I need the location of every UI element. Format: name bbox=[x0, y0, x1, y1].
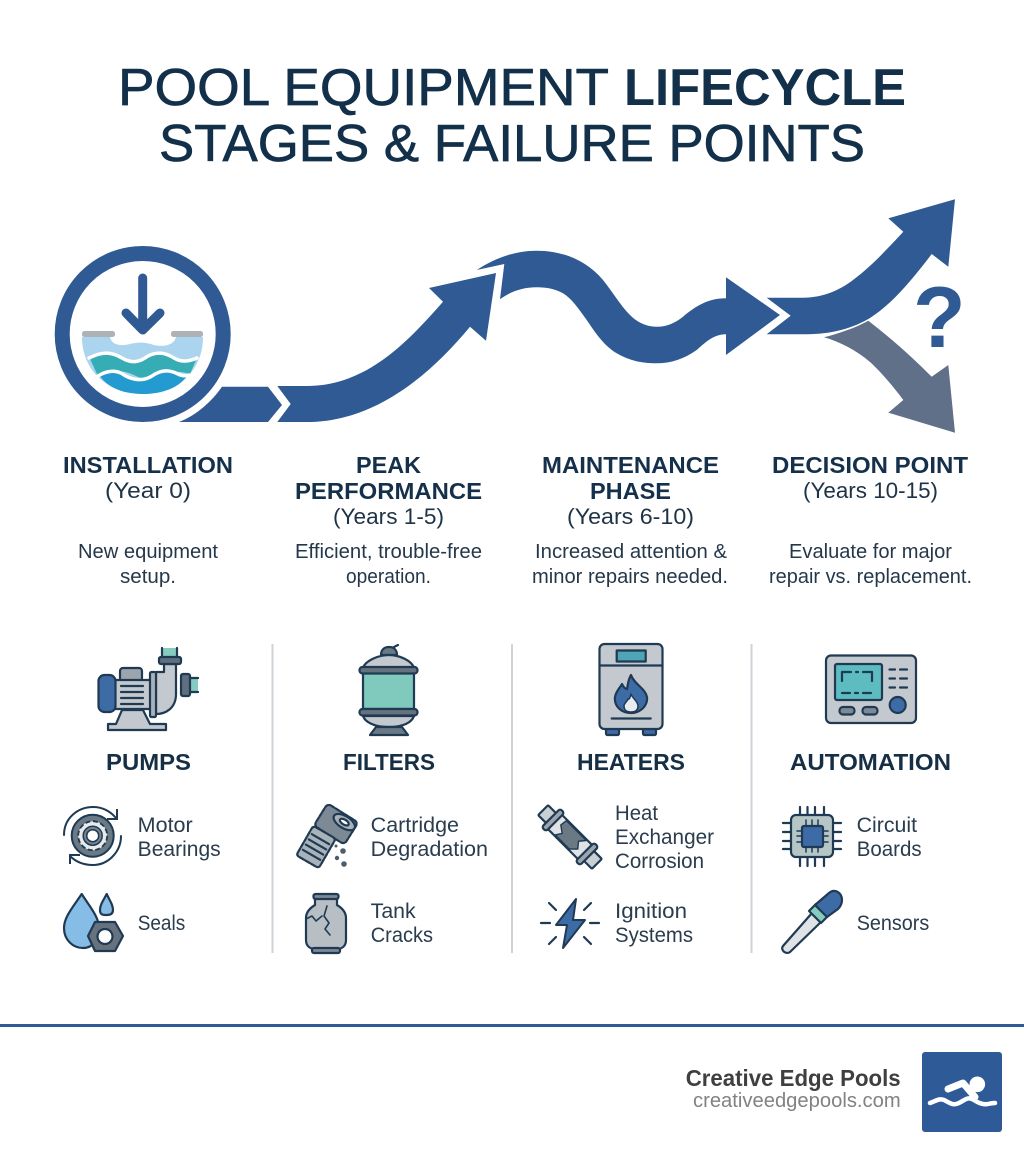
title: LIFECYCLE bbox=[624, 59, 906, 117]
label: tank cracks bbox=[371, 900, 433, 947]
heading: automation: AUTOMATION bbox=[790, 749, 951, 775]
label: cartridge degradation bbox=[371, 814, 488, 861]
label: sensors: Sensors bbox=[857, 912, 929, 935]
title: POOL EQUIPMENT bbox=[118, 59, 609, 117]
stage: peak performance: PEAK bbox=[356, 452, 421, 478]
stage: peak performance: PERFORMANCE bbox=[295, 478, 482, 504]
stage: peak performance: (Years 1-5) bbox=[333, 504, 444, 529]
stage: maintenance phase bbox=[532, 452, 728, 588]
icon: installation badge bbox=[62, 254, 223, 414]
stage: decision point: repair vs. replacement. bbox=[769, 566, 972, 588]
panel: filters bbox=[296, 645, 488, 953]
stage: maintenance phase: Increased attention & bbox=[535, 541, 728, 563]
lifecycle flow arrows bbox=[62, 199, 966, 433]
website: creativeedgepools.com bbox=[693, 1090, 901, 1112]
panel: automation bbox=[782, 656, 951, 953]
label: tank cracks: Tank bbox=[371, 900, 416, 923]
arrow: peak performance segment bbox=[277, 273, 496, 422]
stage: decision point: Evaluate for major bbox=[789, 541, 952, 563]
brand name: Creative Edge Pools bbox=[686, 1065, 901, 1091]
label: heat exchanger corrosion bbox=[615, 802, 714, 873]
stage: installation bbox=[63, 452, 233, 588]
label: circuit boards: Circuit bbox=[857, 814, 917, 837]
heading: pumps: PUMPS bbox=[106, 749, 191, 775]
stage: installation: New equipment bbox=[78, 541, 218, 563]
logo: swimmer bbox=[922, 1052, 1002, 1132]
arrow: decision upward branch bbox=[767, 199, 955, 334]
label: heat exchanger corrosion: Corrosion bbox=[615, 850, 704, 873]
arrow: installation segment bbox=[179, 387, 282, 422]
stage: decision point: DECISION POINT bbox=[772, 452, 968, 478]
arrow: decision downward branch bbox=[824, 321, 955, 433]
heading: filters: FILTERS bbox=[343, 749, 435, 775]
icon: pump bbox=[98, 648, 198, 730]
stage: installation: (Year 0) bbox=[105, 478, 191, 503]
icon: corroded heat exchanger bbox=[534, 801, 606, 873]
panel: heaters bbox=[534, 644, 714, 948]
label: ignition systems: Ignition bbox=[615, 900, 687, 923]
icon: sensor probe bbox=[782, 891, 842, 953]
panel: pumps bbox=[64, 648, 221, 951]
label: cartridge degradation: Degradation bbox=[371, 838, 488, 861]
icon: control panel bbox=[826, 656, 916, 723]
stage: maintenance phase: minor repairs needed. bbox=[532, 566, 728, 588]
heading: heaters: HEATERS bbox=[577, 749, 685, 775]
stage: decision point bbox=[769, 452, 972, 588]
icon: motor bearing bbox=[64, 807, 121, 865]
label: circuit boards: Boards bbox=[857, 838, 922, 861]
title: STAGES & FAILURE POINTS bbox=[159, 115, 865, 173]
icon: sand filter bbox=[360, 645, 418, 735]
icon: seals bbox=[64, 894, 123, 951]
label: ignition systems: Systems bbox=[615, 924, 693, 947]
stage: peak performance: Efficient, trouble-free bbox=[295, 541, 482, 563]
stage: peak performance: operation. bbox=[346, 566, 431, 588]
label: motor bearings bbox=[138, 814, 221, 861]
arrow: maintenance segment bbox=[477, 251, 780, 363]
icon: tank cracks bbox=[306, 894, 346, 953]
label: cartridge degradation: Cartridge bbox=[371, 814, 459, 837]
icon: circuit board chip bbox=[783, 807, 841, 866]
label: heat exchanger corrosion: Heat bbox=[615, 802, 658, 825]
icon: heater bbox=[600, 644, 662, 735]
stage: maintenance phase: MAINTENANCE bbox=[542, 452, 719, 478]
stage: maintenance phase: PHASE bbox=[590, 478, 671, 504]
stage: installation: INSTALLATION bbox=[63, 452, 233, 478]
label: circuit boards bbox=[857, 814, 922, 861]
label: ignition systems bbox=[615, 900, 693, 947]
label: motor bearings: Motor bbox=[138, 814, 193, 837]
label: tank cracks: Cracks bbox=[371, 924, 433, 947]
label: motor bearings: Bearings bbox=[138, 838, 221, 861]
stage: peak performance bbox=[295, 452, 482, 588]
icon: question mark: ? bbox=[913, 270, 966, 366]
label: heat exchanger corrosion: Exchanger bbox=[615, 826, 714, 849]
icon: cartridge degradation bbox=[296, 803, 358, 868]
label: seals: Seals bbox=[138, 912, 185, 935]
icon: ignition spark bbox=[541, 899, 599, 948]
stage: installation: setup. bbox=[120, 566, 176, 588]
stage: maintenance phase: (Years 6-10) bbox=[567, 504, 694, 529]
stage: decision point: (Years 10-15) bbox=[803, 478, 938, 503]
title bbox=[118, 59, 906, 173]
footer brand bbox=[686, 1052, 1002, 1132]
